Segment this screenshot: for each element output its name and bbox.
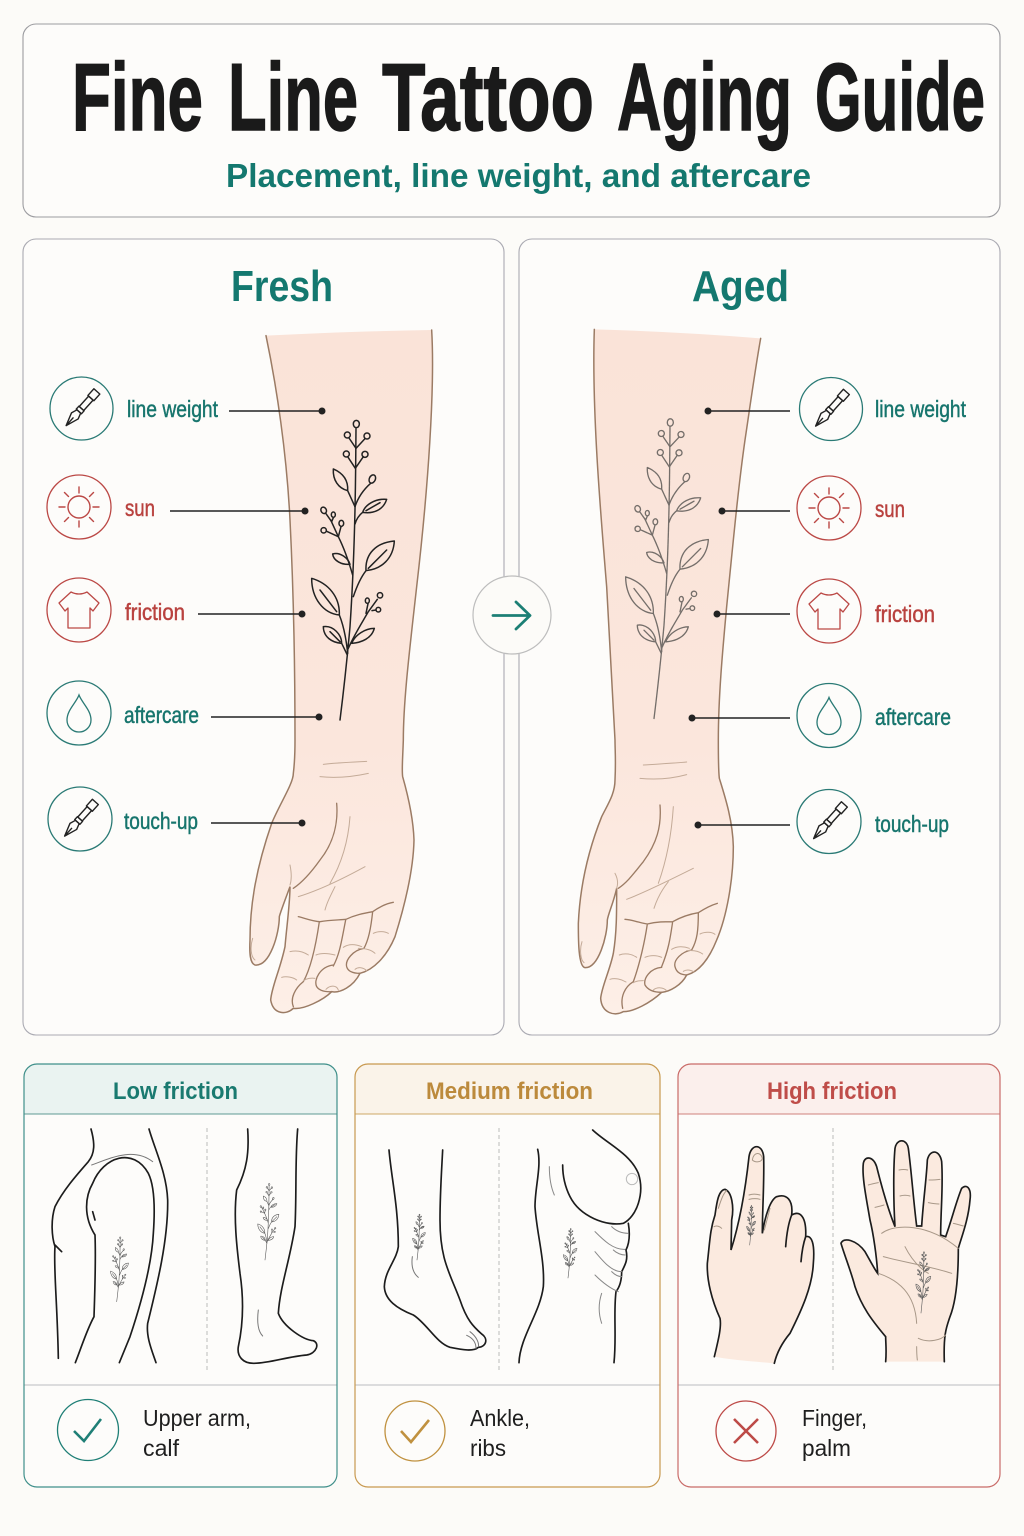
low friction card [24,1064,337,1487]
fresh forearm and hand [250,330,433,1013]
icon: check [58,1400,118,1460]
callout: touch-up [694,790,949,854]
leader line [229,408,326,414]
upper arm illustration [52,1129,168,1363]
callout: line weight [50,377,326,440]
title panel [23,24,1000,217]
icon: water drop [47,681,111,745]
back of hand illustration [707,1147,814,1363]
icon: sun [797,476,861,540]
panel: high friction [678,1064,1000,1487]
calf tattoo [258,1184,279,1260]
leader line [688,714,790,722]
title: Tattoo [382,44,594,151]
leader line [170,508,308,514]
ribs tattoo [563,1229,577,1278]
calf illustration [235,1129,317,1363]
icon: pen [800,378,862,440]
text: upper arm, calf [143,1405,251,1461]
title: Line [228,44,358,151]
icon: shirt [47,578,111,642]
leader line [718,508,790,514]
text: ankle, ribs [470,1405,530,1461]
panel: low friction [24,1064,337,1487]
ankle tattoo [413,1214,425,1260]
icon: shirt [797,579,861,643]
text: upper arm, calf: Upper arm, [143,1405,251,1431]
aged forearm and hand [578,329,761,1014]
title: Fine [72,44,203,151]
high friction card [678,1064,1000,1487]
callout: aftercare [688,684,951,748]
leader line [704,408,790,414]
icon: cross [716,1401,776,1461]
label: aftercare: aftercare [875,704,951,730]
subtitle: Placement, line weight, and aftercare [226,157,811,194]
aged tattoo plant [626,419,708,718]
icon: check [385,1401,445,1461]
title panel frame [23,24,1000,217]
leader line [198,610,306,618]
fresh heading: Fresh [231,262,333,311]
title: Aging [617,44,792,151]
upper arm tattoo [111,1237,128,1302]
callout: friction [47,578,306,642]
icon: sun [47,475,111,539]
icon: pen [50,377,113,440]
text: ankle, ribs: ribs [470,1435,506,1461]
panel: aged [519,239,1000,1035]
ankle illustration [384,1150,486,1350]
icon: water drop [797,684,861,748]
label: aftercare: aftercare [124,702,199,728]
panel: fresh [23,239,504,1035]
text: upper arm, calf: calf [143,1435,180,1461]
text: finger, palm [802,1405,867,1461]
palm illustration [841,1141,970,1362]
leader line [714,610,790,618]
palm tattoo [916,1252,931,1313]
ribs illustration [519,1130,641,1363]
label: touch-up: touch-up [124,808,198,834]
icon: pen [797,790,861,854]
label: sun: sun [125,495,155,521]
aged panel frame [519,239,1000,1035]
label: line weight: line weight [127,396,219,422]
label: line weight: line weight [875,396,967,422]
high friction heading: High friction [767,1078,897,1105]
leader line [211,714,322,720]
leader line [211,820,306,826]
medium friction heading: Medium friction [426,1078,593,1105]
label: touch-up: touch-up [875,811,949,837]
text: finger, palm: Finger, [802,1405,867,1431]
label: sun: sun [875,496,905,522]
panel: medium friction [355,1064,660,1487]
finger tattoo [747,1205,756,1245]
label: friction: friction [875,601,935,627]
icon: pen [48,787,112,851]
callout: sun [47,475,308,539]
arrow: fresh to aged [473,576,551,654]
callout: sun [718,476,905,540]
callout: line weight [704,378,967,440]
medium friction card [355,1064,660,1487]
fresh tattoo plant [312,420,394,720]
leader line [694,822,790,828]
low friction heading: Low friction [113,1078,238,1105]
label: friction: friction [125,599,185,625]
callout: touch-up [48,787,306,851]
aged heading: Aged [692,262,789,311]
callout: aftercare [47,681,322,745]
text: finger, palm: palm [802,1435,851,1461]
text: ankle, ribs: Ankle, [470,1405,530,1431]
title [72,44,985,151]
callout: friction [714,579,935,643]
fresh panel frame [23,239,504,1035]
